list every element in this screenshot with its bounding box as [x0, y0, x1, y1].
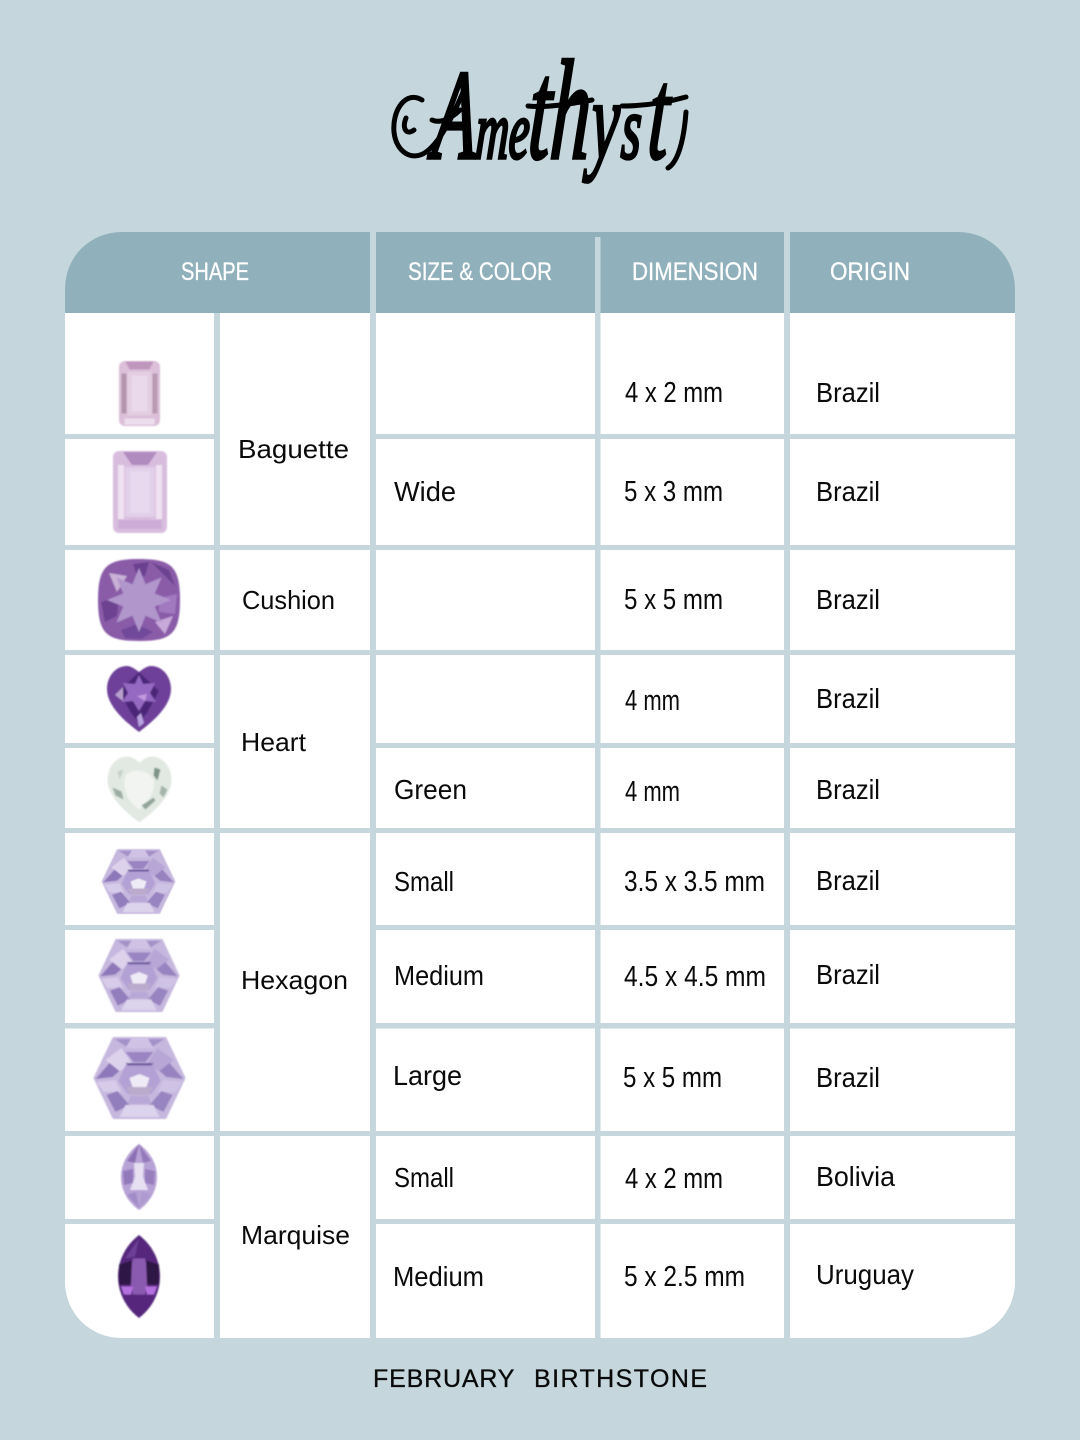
- title: A: [426, 45, 482, 186]
- header labels: [181, 258, 910, 286]
- dimension: heart: 4 mm: [625, 685, 680, 717]
- icon: hexagon gem medium: [99, 940, 179, 1011]
- header: dimension: DIMENSION: [632, 258, 758, 286]
- title: me: [474, 87, 532, 176]
- dimension: baguette small: 4 x 2 mm: [625, 377, 723, 409]
- origin row 10: Uruguay: [816, 1259, 914, 1290]
- size: marquise small: Small: [394, 1162, 454, 1193]
- dimension: hexagon large: 5 x 5 mm: [623, 1062, 722, 1094]
- origin row 5: Brazil: [816, 774, 880, 805]
- origin row 6: Brazil: [816, 865, 880, 896]
- shape: heart: Heart: [241, 727, 307, 757]
- dimension: marquise medium: 5 x 2.5 mm: [624, 1261, 745, 1293]
- icon: baguette gem small: [119, 361, 160, 426]
- dimension: hexagon medium: 4.5 x 4.5 mm: [624, 961, 766, 993]
- shape: cushion: Cushion: [242, 585, 335, 615]
- header: size and color: SIZE & COLOR: [408, 258, 552, 286]
- title: th: [525, 31, 596, 189]
- icon: hexagon gem small: [102, 850, 174, 913]
- table header band: [65, 232, 1015, 313]
- dimension: cushion: 5 x 5 mm: [624, 584, 723, 616]
- origin row 3: Brazil: [816, 584, 880, 615]
- origin row 2: Brazil: [816, 476, 880, 507]
- shape: marquise: Marquise: [241, 1220, 350, 1250]
- origin row 1: Brazil: [816, 377, 880, 408]
- title: t: [645, 42, 675, 186]
- origin row 4: Brazil: [816, 683, 880, 714]
- header: origin: ORIGIN: [830, 258, 910, 286]
- shape: hexagon: Hexagon: [241, 965, 348, 995]
- icon: marquise gem small: [121, 1144, 157, 1210]
- size: wide: Wide: [394, 476, 456, 507]
- column: origin: [816, 377, 914, 1290]
- size: marquise medium: Medium: [393, 1261, 484, 1292]
- dimension: hexagon small: 3.5 x 3.5 mm: [624, 866, 765, 898]
- dimension: baguette wide: 5 x 3 mm: [624, 476, 723, 508]
- shape: baguette: Baguette: [238, 434, 349, 464]
- origin row 7: Brazil: [816, 959, 880, 990]
- column: size and color: [393, 476, 484, 1292]
- column: dimension: [623, 377, 766, 1293]
- table body: [65, 232, 1015, 1338]
- icon: baguette gem large: [113, 451, 167, 533]
- icon: heart gem green: [108, 756, 172, 822]
- dimension: heart green: 4 mm: [625, 776, 680, 808]
- footer text: BIRTHSTONE: [534, 1365, 707, 1393]
- panel: table: [65, 232, 1015, 1338]
- icon: marquise gem large: [118, 1235, 160, 1318]
- dimension: marquise small: 4 x 2 mm: [625, 1163, 723, 1195]
- size: hexagon small: Small: [394, 866, 454, 897]
- color: green: Green: [394, 774, 467, 805]
- title: y: [582, 58, 624, 183]
- title: s: [619, 78, 645, 178]
- origin row 9: Bolivia: [816, 1161, 896, 1192]
- icon: heart gem purple: [107, 666, 171, 732]
- size: hexagon large: Large: [393, 1060, 462, 1091]
- header: shape: SHAPE: [181, 258, 249, 286]
- title: [394, 31, 686, 189]
- footer text: FEBRUARY: [373, 1365, 515, 1393]
- icon: hexagon gem large: [94, 1038, 184, 1118]
- origin row 8: Brazil: [816, 1062, 880, 1093]
- size: hexagon medium: Medium: [394, 960, 484, 991]
- column: shape names: [238, 434, 350, 1250]
- icon: cushion gem: [98, 559, 180, 641]
